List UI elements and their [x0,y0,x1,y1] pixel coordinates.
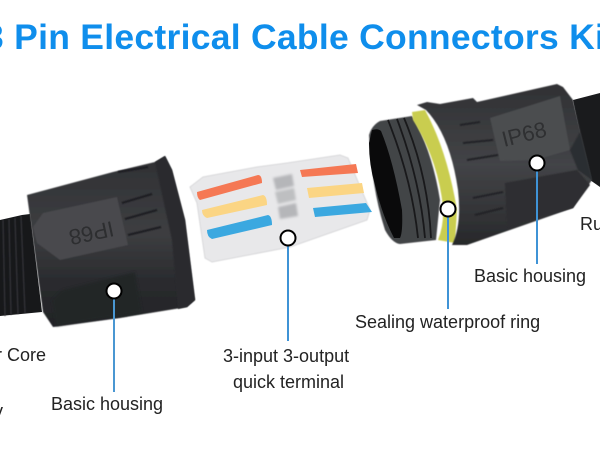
callout: basic housing right: Basic housing [474,266,586,286]
yellow sealing ring [412,110,457,243]
blue left lever [207,215,272,239]
yellow left lever [202,195,267,218]
terminal body [190,155,370,262]
right far thread [573,93,600,187]
IP68 panel: IP68 [67,216,116,250]
callout: basic housing left [51,284,163,414]
left cap rim [155,156,195,309]
IP68 panel: IP68 [499,117,549,152]
right ridges [460,122,503,215]
opening [369,129,402,238]
left thread [0,214,42,316]
right connector [369,84,600,245]
lower panel [505,170,590,227]
yellow right lever [307,183,364,198]
callout: quick terminal: 3-input 3-output [223,346,349,366]
callout: quick terminal [223,230,349,392]
blue right lever [313,203,372,217]
lower panel [52,272,142,326]
callout: sealing ring: Sealing waterproof ring [355,312,540,332]
left ridges [118,167,161,235]
left housing [27,156,195,327]
IP68 panel [490,96,570,161]
callout: basic housing left: Basic housing [51,394,163,414]
right housing [417,84,592,245]
orange left lever [197,175,262,200]
left connector [0,156,195,327]
center clamps [273,174,298,219]
callout: quick terminal: quick terminal [233,372,344,392]
quick terminal [190,155,372,262]
callout: basic housing right [474,156,586,286]
right facet [570,132,592,180]
right thread collar [369,116,440,244]
orange right lever [300,164,358,177]
IP68 panel [33,197,128,260]
callout: sealing ring [355,202,540,332]
